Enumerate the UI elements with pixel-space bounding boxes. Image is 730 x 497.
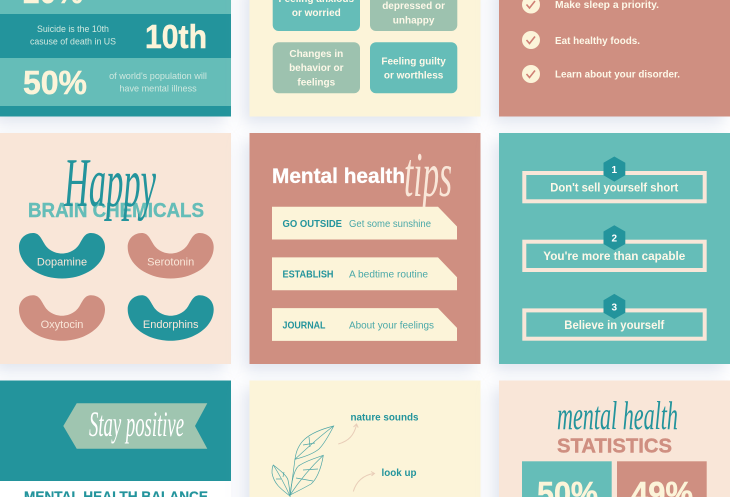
tip: establish: A bedtime routine xyxy=(349,270,428,281)
box: feeling depressed: depressed or xyxy=(382,1,445,12)
box: feeling anxious xyxy=(273,0,360,31)
tip: go outside: GO OUTSIDE xyxy=(282,218,342,230)
stat box: 50% xyxy=(522,461,612,497)
panel: mental health tips xyxy=(250,133,480,364)
shape: endorphins xyxy=(128,295,214,341)
box: changes in behavior xyxy=(273,42,360,93)
tip: journal: About your feelings xyxy=(349,320,434,331)
tip: go outside xyxy=(272,207,457,240)
affirmation 2 xyxy=(524,225,705,270)
text: suicide statistic: Suicide is the 10th xyxy=(37,24,109,34)
item: disorder: Learn about your disorder. xyxy=(555,70,680,80)
banner: stay positive: Stay positive xyxy=(89,404,184,444)
arrow: to look up xyxy=(353,472,374,492)
shape: serotonin: Serotonin xyxy=(147,256,194,268)
text: population statistic: of world's population will xyxy=(109,71,207,81)
panel: affirmations xyxy=(499,133,730,364)
affirmation 1 xyxy=(524,156,705,201)
shape: oxytocin xyxy=(19,295,105,341)
shape: dopamine: Dopamine xyxy=(37,256,87,268)
label: nature sounds: nature sounds xyxy=(350,412,419,424)
box: changes in behavior: Changes in xyxy=(289,49,343,60)
box: feeling guilty xyxy=(370,42,457,93)
panel: self care checklist xyxy=(499,0,730,116)
tip: establish xyxy=(272,257,457,290)
panel: nature xyxy=(250,380,480,497)
item: sleep: Make sleep a priority. xyxy=(555,0,659,11)
stat: 50%: 50% xyxy=(23,64,87,101)
shape: endorphins: Endorphins xyxy=(143,319,199,331)
script: tips: tips xyxy=(404,139,452,210)
item: sleep xyxy=(522,0,659,14)
text: population statistic: have mental illness xyxy=(119,84,197,94)
box: changes in behavior: behavior or xyxy=(289,63,344,74)
affirmation 3: 3 xyxy=(612,302,618,313)
tip: journal xyxy=(272,308,457,341)
box: feeling depressed: unhappy xyxy=(393,16,435,26)
panel: mental health statistics xyxy=(499,380,730,497)
affirmation 1: Don't sell yourself short xyxy=(550,182,678,194)
icon: leaves xyxy=(272,426,334,497)
box: feeling depressed xyxy=(370,0,457,31)
affirmation 2: 2 xyxy=(612,234,618,245)
panel: statistics bands xyxy=(0,0,231,116)
stat box: 49% xyxy=(617,461,707,497)
item: disorder xyxy=(522,65,680,83)
banner: stay positive xyxy=(63,403,207,449)
shape: dopamine xyxy=(19,233,105,278)
box: changes in behavior: feelings xyxy=(297,78,336,88)
affirmation 3 xyxy=(524,294,705,339)
heading: brain chemicals: BRAIN CHEMICALS xyxy=(28,200,204,222)
text: suicide statistic: casuse of death in US xyxy=(30,36,116,46)
panel: happy brain chemicals xyxy=(0,133,231,364)
label: look up: look up xyxy=(382,467,416,479)
item: food: Eat healthy foods. xyxy=(555,36,640,47)
box: feeling guilty: Feeling guilty xyxy=(381,56,446,68)
affirmation 1: 1 xyxy=(612,165,618,176)
stat: 10th: 10th xyxy=(145,18,207,55)
panel: stay positive xyxy=(0,380,231,497)
box: feeling guilty: or worthless xyxy=(384,70,444,82)
panel: symptoms xyxy=(250,0,480,116)
tip: establish: ESTABLISH xyxy=(282,269,334,281)
affirmation 2: You're more than capable xyxy=(543,251,685,263)
shape: serotonin xyxy=(128,233,214,278)
arrow: to nature sounds xyxy=(338,424,358,444)
box: feeling anxious: or worried xyxy=(292,8,341,19)
panel: happy brain chemicals: Happy xyxy=(64,145,156,222)
tip: journal: JOURNAL xyxy=(282,319,326,331)
affirmation 3: Believe in yourself xyxy=(564,320,664,332)
item: food xyxy=(522,31,640,49)
heading: mental health: Mental health xyxy=(272,165,405,188)
heading: statistics: STATISTICS xyxy=(557,436,672,458)
shape: oxytocin: Oxytocin xyxy=(41,319,83,331)
tip: go outside: Get some sunshine xyxy=(349,219,431,230)
